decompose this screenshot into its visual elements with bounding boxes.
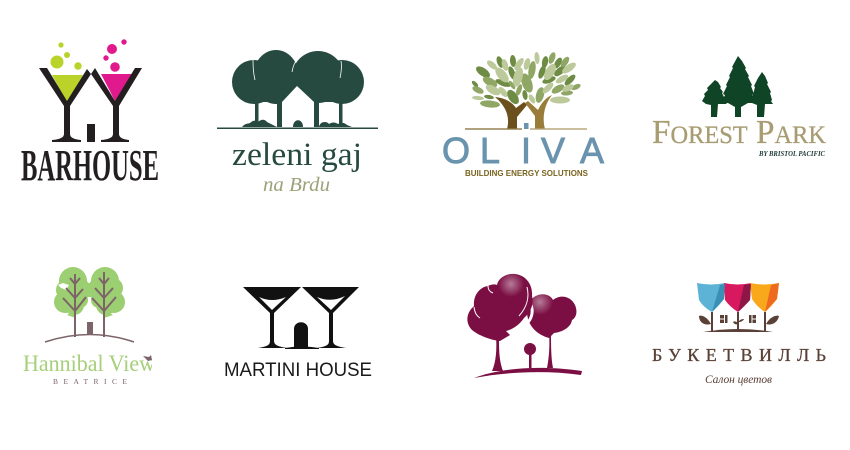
icon: small tree: [524, 343, 536, 368]
logo: Martini House: [224, 287, 372, 381]
icon: cocktail glasses house: [39, 68, 142, 142]
tagline: building energy solutions: BUILDING ENERGY SOLUTIONS: [465, 168, 588, 178]
wordmark: Hannibal View: Hannibal View: [23, 351, 155, 376]
icon: three pine trees: [702, 56, 773, 117]
logo: Oliva: [442, 51, 604, 178]
wordmark: BARHOUSE: BARHOUSE: [21, 141, 159, 190]
icon: bird: [143, 355, 152, 361]
logo: Forest Park: [652, 56, 826, 158]
wordmark: OLIVA: OLIVA: [442, 130, 604, 171]
icon: tree branches, house and hill: [45, 272, 134, 342]
icon: olive tree leaves: [471, 51, 582, 108]
logo: maroon trees: [467, 271, 582, 378]
wordmark: Forest Park: FOREST PARK: [652, 114, 826, 151]
icon: martini glasses house: [243, 287, 359, 349]
tagline: na Brdu: na Brdu: [263, 174, 330, 196]
icon: trees and house: [217, 50, 378, 129]
logo: zeleni gaj: [217, 50, 378, 196]
logo: Barhouse: [21, 39, 159, 190]
wordmark: MARTINI HOUSE: MARTINI HOUSE: [224, 360, 372, 381]
icon: two green trees: [54, 267, 125, 318]
icon: left tree: [467, 271, 533, 371]
icon: hill: [474, 368, 582, 378]
icon: right tree: [527, 289, 576, 368]
icon: tulip glasses: [697, 283, 779, 312]
icon: stems, leaves and house: [699, 312, 779, 332]
tagline: by Bristol Pacific: BY BRISTOL PACIFIC: [758, 149, 826, 158]
tagline: Beatrice: BEATRICE: [53, 377, 127, 386]
wordmark: zeleni gaj: zeleni gaj: [232, 137, 362, 173]
tagline: flower salon: Салон цветов: [705, 374, 772, 386]
icon: cocktail bubbles: [50, 39, 127, 72]
wordmark: Buketvill: БУКЕТВИЛЛЬ: [652, 345, 826, 365]
logo: Buketvill: [652, 283, 826, 386]
logo: Hannibal View: [23, 267, 155, 386]
icon: tree trunks forming house: [465, 95, 587, 130]
